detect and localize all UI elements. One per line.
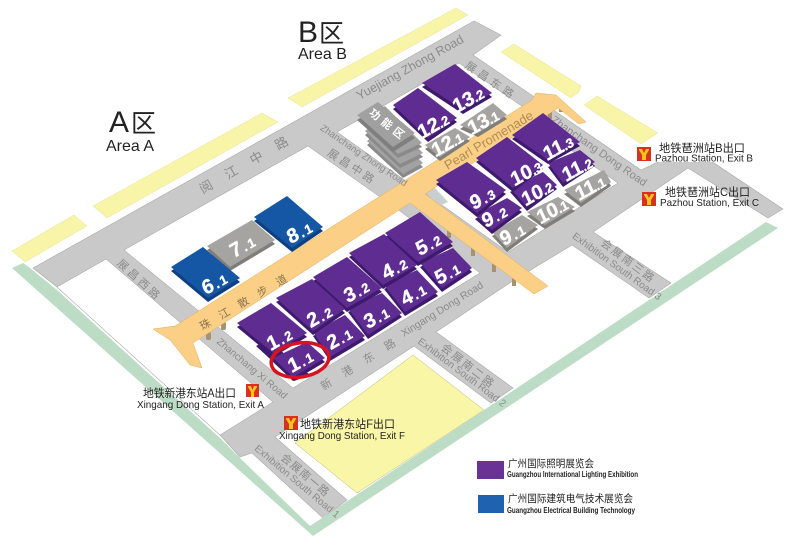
road labels: Xingang Dong Road xyxy=(399,279,486,340)
legend: electrical building technology: Guangzhou Electrical Building Technology xyxy=(507,506,635,515)
functional zone stack xyxy=(357,102,423,178)
area B label xyxy=(298,16,347,63)
road labels: 会展南二路 xyxy=(439,341,498,391)
legend: electrical building technology xyxy=(478,492,635,515)
hall 11.3 xyxy=(512,113,580,166)
hall 10.1 xyxy=(527,193,575,229)
metro exit B: Pazhou Station, Exit B xyxy=(655,152,753,164)
pearl promenade xyxy=(153,93,586,368)
hall 3.1 xyxy=(348,293,402,339)
legend: lighting exhibition xyxy=(477,457,638,479)
metro exit A xyxy=(137,384,264,411)
hall 5.2: 5.2 xyxy=(413,227,446,261)
hall 9.3 xyxy=(436,162,506,217)
metro exit C xyxy=(642,185,759,209)
road labels: 展昌西路 xyxy=(114,257,164,304)
area A label: A xyxy=(109,106,129,139)
hall 6.1: 6.1 xyxy=(199,266,232,300)
hall 11.1: 11.1 xyxy=(572,170,609,206)
legend: lighting exhibition: 广州国际照明展览会 xyxy=(508,457,594,470)
functional zone stack: 功能区 xyxy=(366,105,411,144)
road labels: 会展南一路 xyxy=(278,451,332,500)
hall 7.1 xyxy=(207,220,275,271)
road labels: Yuejiang Zhong Road xyxy=(354,32,466,103)
hall 1.1: 1.1 xyxy=(285,344,318,378)
metro exit C: 地铁琶洲站C出口 xyxy=(665,185,750,199)
hall 4.2 xyxy=(349,234,417,289)
hall 10.1: 10.1 xyxy=(533,193,571,229)
hall 4.1 xyxy=(384,270,438,316)
road labels: Zhanchang Dong Road xyxy=(549,114,649,189)
hall 9.2: 9.2 xyxy=(479,199,512,233)
hall 4.2: 4.2 xyxy=(379,251,412,285)
hall 1.1 xyxy=(273,342,325,381)
hall 4.1: 4.1 xyxy=(398,277,431,311)
road labels: 展昌中路 xyxy=(325,146,379,188)
hall 11.3: 11.3 xyxy=(540,130,577,166)
hall 3.2: 3.2 xyxy=(341,274,374,308)
city blocks xyxy=(57,63,618,435)
hall 9.3: 9.3 xyxy=(467,181,500,215)
green boundary band xyxy=(12,222,778,536)
metro exit B: 地铁琶洲站B出口 xyxy=(659,141,745,155)
hall 5.1 xyxy=(420,248,472,292)
hall 11.1 xyxy=(564,170,611,207)
road labels: 展昌东路 xyxy=(462,59,519,103)
area B label: B xyxy=(298,16,318,49)
road labels: 会展南三路 xyxy=(598,236,658,286)
legend: electrical building technology: 广州国际建筑电气技术展览会 xyxy=(508,492,633,505)
hall 9.1 xyxy=(492,215,538,252)
hall 13.1 xyxy=(460,103,507,140)
metro exit A: 地铁新港东站A出口 xyxy=(143,386,236,400)
road labels: 新港东路 xyxy=(318,328,410,393)
hall 5.2 xyxy=(385,212,453,266)
hall 10.3 xyxy=(476,137,545,192)
exit B halo xyxy=(656,136,756,162)
hall 9.1: 9.1 xyxy=(497,217,530,251)
gray patch near hall 9 xyxy=(425,188,448,206)
hall 3.2 xyxy=(313,257,382,312)
road labels: Exhibition South Road 3 xyxy=(570,231,663,303)
road labels: Zhanchang Zhong Road xyxy=(318,123,409,189)
hall 2.2 xyxy=(276,279,345,335)
area B label: Area B xyxy=(298,46,347,63)
hall 11.2: 11.2 xyxy=(559,151,596,187)
road labels: Zhanchang Xi Road xyxy=(214,336,289,402)
road labels: 阅江中路 xyxy=(197,126,305,197)
red highlight circle xyxy=(269,339,331,381)
hall 12.2 xyxy=(393,88,457,144)
hall 10.2: 10.2 xyxy=(518,175,556,211)
metro exit C: Pazhou Station, Exit C xyxy=(660,197,759,209)
hall 6.1 xyxy=(171,247,240,302)
metro exit B xyxy=(637,141,753,164)
legend xyxy=(477,457,638,515)
hall 11.2 xyxy=(548,150,596,187)
area A label: Area A xyxy=(106,138,154,155)
hall 7.1: 7.1 xyxy=(227,229,260,263)
road labels: 珠江散步道 xyxy=(197,266,299,333)
hall 2.1: 2.1 xyxy=(324,321,357,355)
hall 2.1 xyxy=(313,315,365,361)
hall 5.1: 5.1 xyxy=(432,256,465,290)
hall 2.2: 2.2 xyxy=(304,299,337,333)
road labels: Pearl Promenade xyxy=(441,108,536,173)
road labels: Exhibition South Road 1 xyxy=(252,443,342,521)
hall 8.1: 8.1 xyxy=(284,215,317,249)
promenade pillars xyxy=(206,103,563,340)
metro exit F: 地铁新港东站F出口 xyxy=(300,417,395,431)
hall 8.1 xyxy=(254,196,323,252)
hall 13.2 xyxy=(422,64,492,118)
area B label: 区 xyxy=(319,20,344,48)
yellow strips xyxy=(12,8,658,262)
hall 3.1: 3.1 xyxy=(361,300,394,334)
metro exit F: Xingang Dong Station, Exit F xyxy=(279,430,405,442)
hall 10.2 xyxy=(510,172,557,211)
metro exit F xyxy=(279,416,405,442)
hall 13.2: 13.2 xyxy=(449,82,487,118)
hall 1.2 xyxy=(237,303,310,381)
legend: lighting exhibition: Guangzhou International Lighting Exhibition xyxy=(507,470,638,479)
area A label xyxy=(106,106,156,155)
hall 12.2: 12.2 xyxy=(414,108,452,144)
area A label: 区 xyxy=(131,110,156,138)
metro exit A: Xingang Dong Station, Exit A xyxy=(137,399,264,411)
hall 13.1: 13.1 xyxy=(464,104,502,140)
hall 1.2: 1.2 xyxy=(264,322,297,356)
hall 9.2 xyxy=(475,198,522,234)
road labels xyxy=(114,32,663,521)
yellow plot xyxy=(295,355,484,493)
hall 12.1: 12.1 xyxy=(428,126,466,162)
road labels: Exhibition South Road 2 xyxy=(415,336,508,410)
hall 10.3: 10.3 xyxy=(507,155,545,191)
